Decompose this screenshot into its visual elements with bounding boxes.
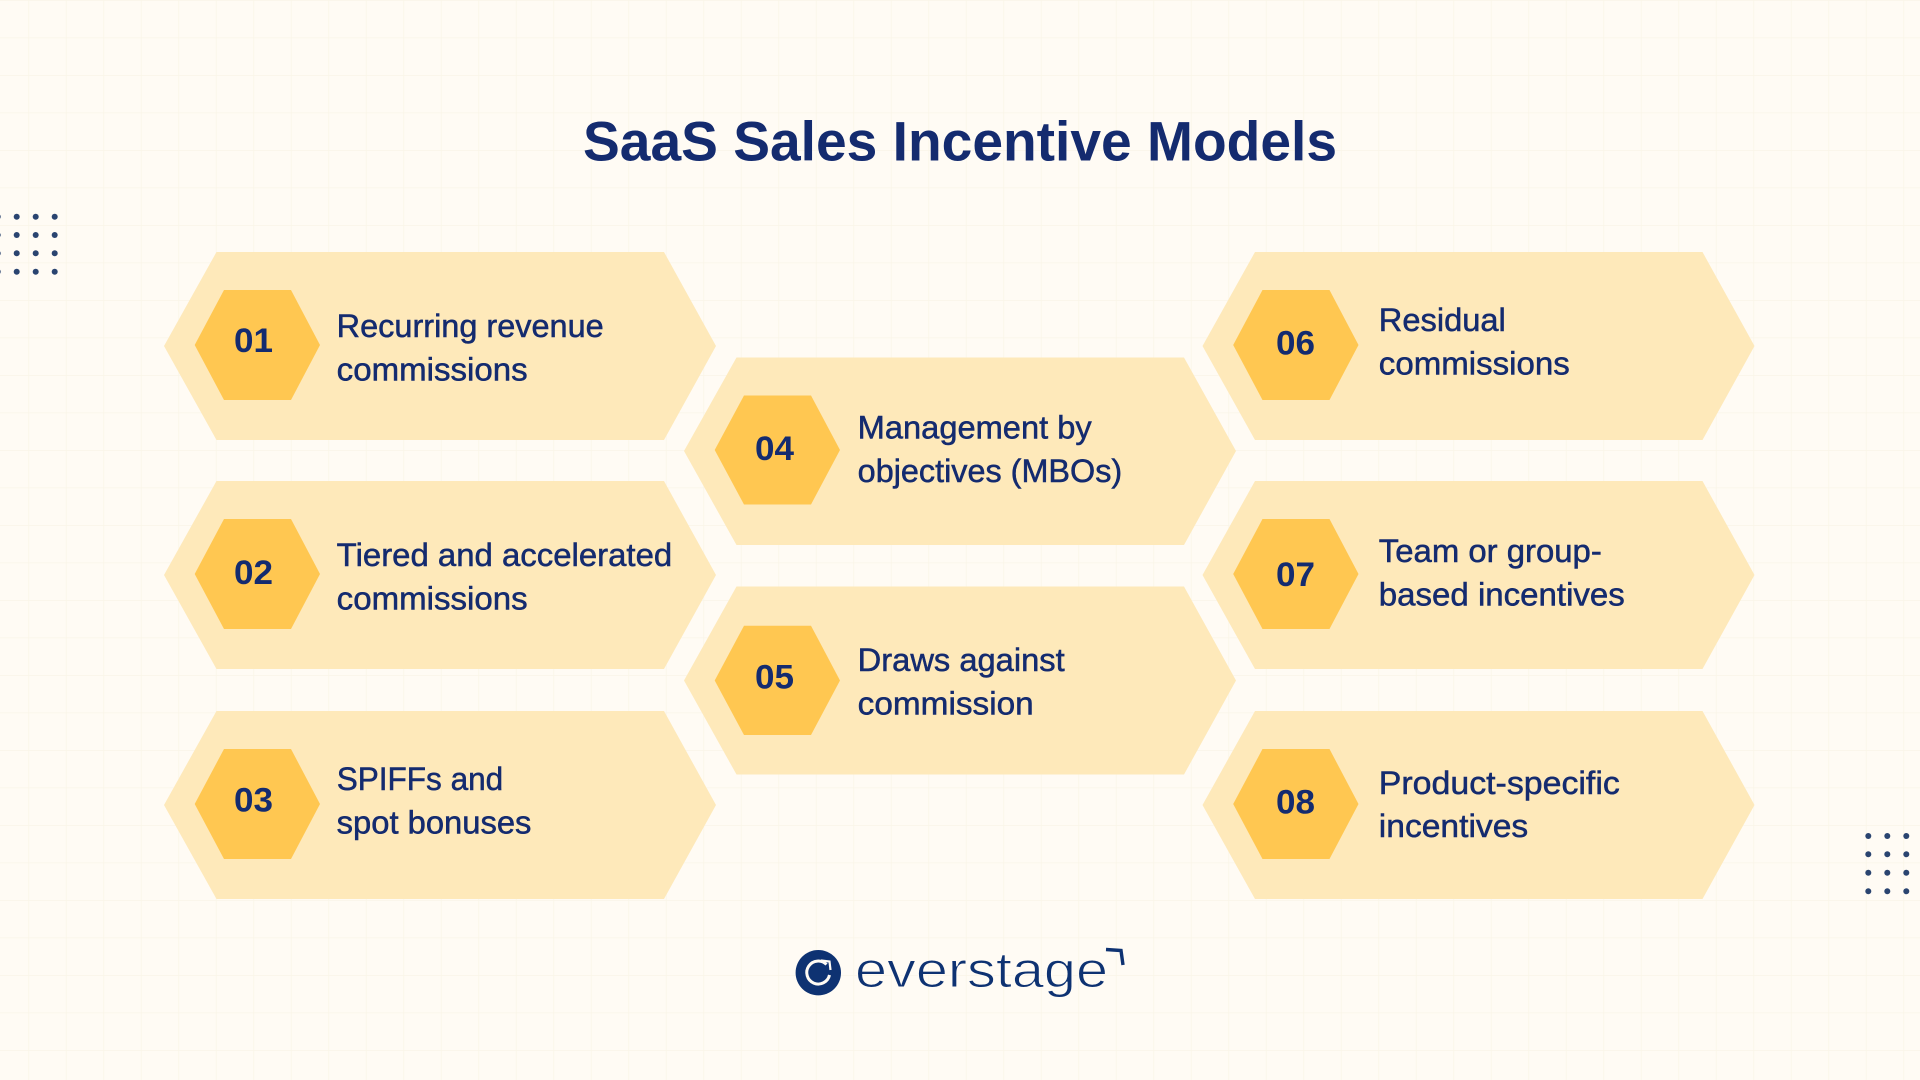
number: 07 [1276,556,1315,594]
panel: 08 Product-specific incentives [1202,711,1754,899]
label: Tiered and accelerated [337,537,672,573]
label: commissions [337,352,528,388]
logo: everstage [796,942,1123,998]
label: Management by [858,410,1092,446]
outer hexagon [684,586,1236,774]
number badge [715,626,840,735]
label: based incentives [1379,576,1625,612]
number badge [1233,519,1358,629]
number: 05 [755,658,794,696]
number: 06 [1276,324,1315,362]
wordmark: everstage [855,942,1108,998]
outer hexagon [1202,481,1754,669]
panel: 03 SPIFFs and spot bonuses [164,711,716,899]
decorative dots: top left [0,214,58,275]
panel: 04 Management by objectives (MBOs) [684,358,1236,545]
label: Team or group- [1379,533,1602,569]
label: Residual [1379,302,1506,338]
label: commission [858,686,1034,722]
outer hexagon [164,481,716,669]
label: SPIFFs and [337,761,503,797]
label: spot bonuses [337,804,531,840]
number badge [1233,290,1358,400]
panel: 01 Recurring revenue commissions [164,252,716,440]
outer hexagon [164,252,716,440]
label: incentives [1379,808,1528,844]
panel: 02 Tiered and accelerated commissions [164,481,716,669]
number badge [195,749,320,859]
number badge [195,290,320,400]
number: 03 [234,782,273,820]
number: 02 [234,554,273,592]
panel: 06 Residual commissions [1202,252,1754,440]
number badge [1233,749,1358,859]
panel: 07 Team or group-based incentives [1202,481,1754,669]
label: commissions [337,580,528,616]
outer hexagon [164,711,716,899]
outer hexagon [1202,252,1754,440]
icon: logo mark [796,950,841,995]
number: 04 [755,430,794,468]
outer hexagon [684,358,1236,545]
number badge [715,396,840,504]
label: Product-specific [1379,765,1620,801]
label: commissions [1379,346,1570,382]
decorative dots: bottom right [1865,833,1909,894]
icon: wordmark corner accent [1106,950,1123,965]
number badge [195,519,320,629]
title: SaaS Sales Incentive Models [583,110,1337,172]
panel: 05 Draws against commission [684,586,1236,774]
label: Draws against [858,642,1065,678]
number: 01 [234,322,273,360]
outer hexagon [1202,711,1754,899]
label: Recurring revenue [337,308,604,344]
label: objectives (MBOs) [858,453,1122,489]
number: 08 [1276,784,1315,822]
